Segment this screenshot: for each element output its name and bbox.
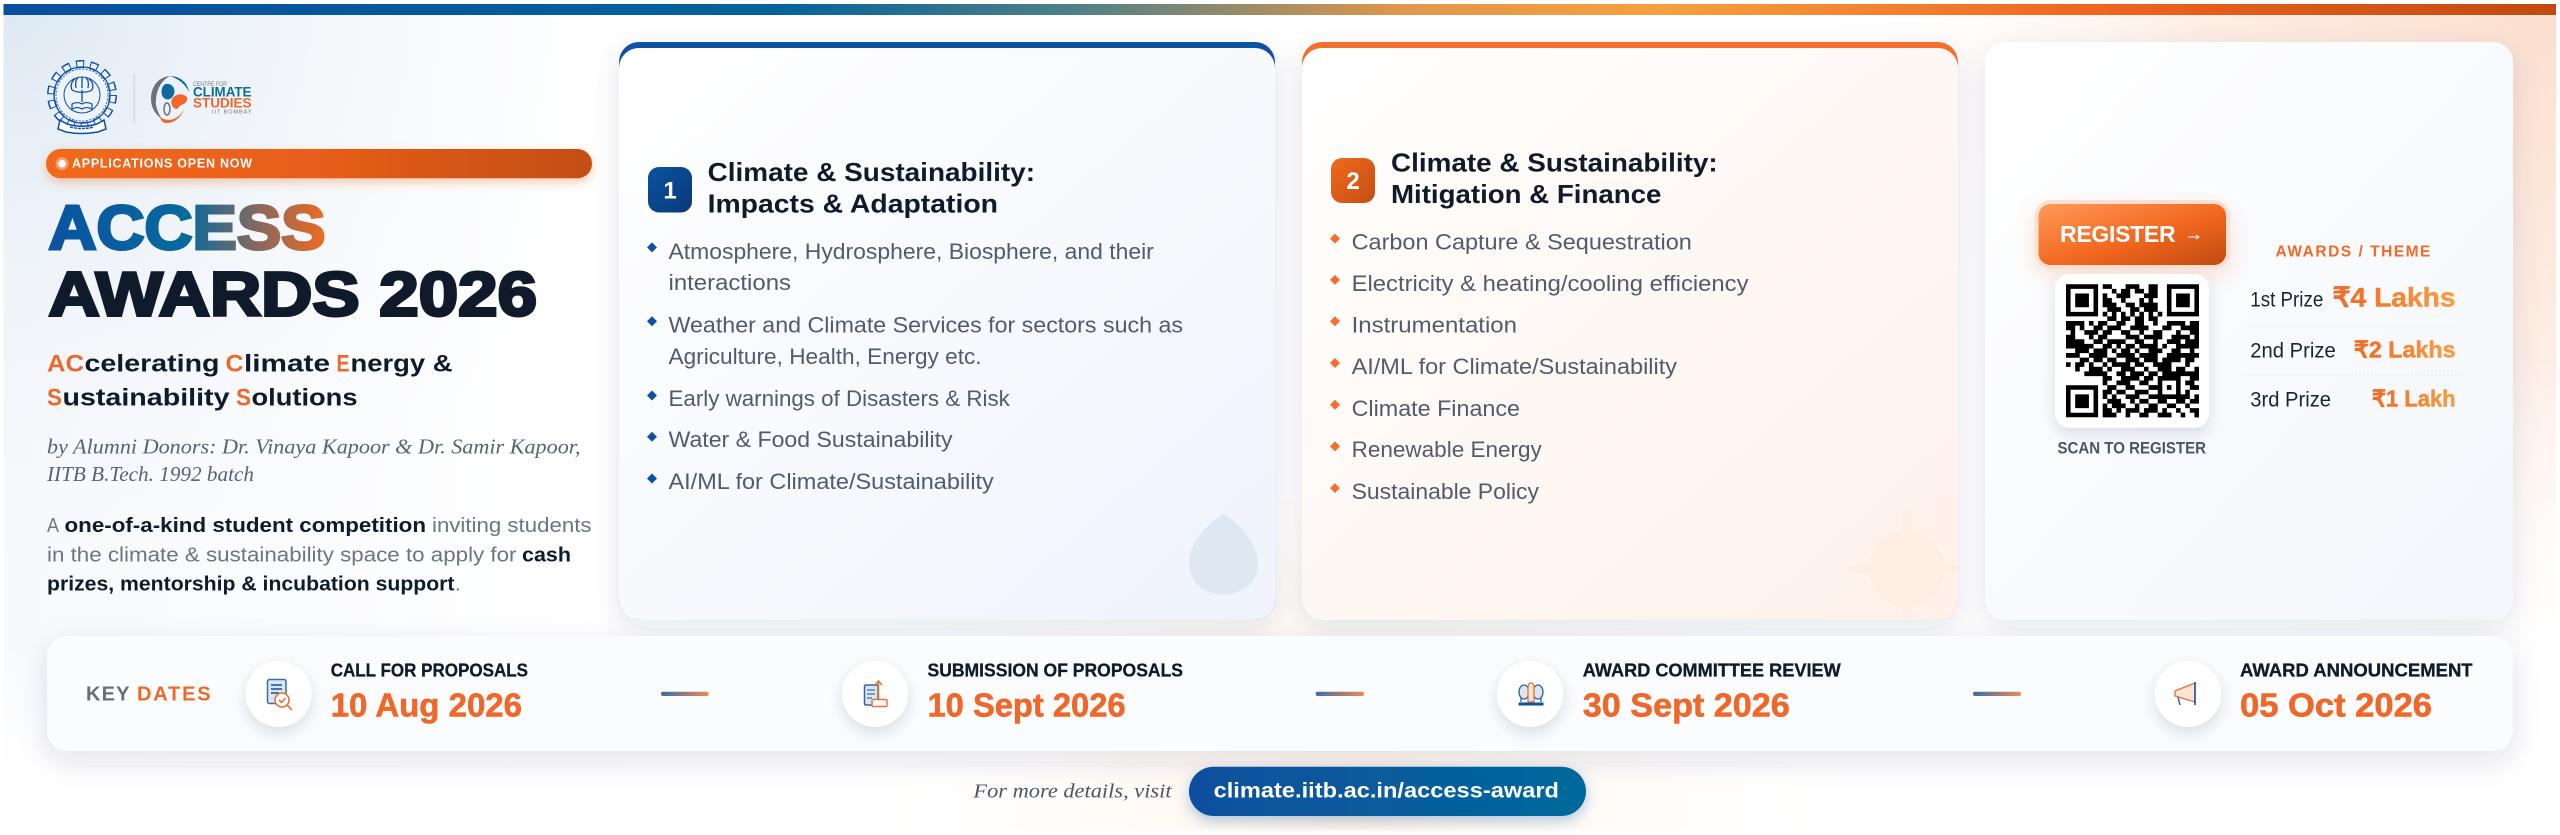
icon: sun xyxy=(1848,509,1928,586)
list: theme 1 topics: Atmosphere, Hydrosphere, Biosphere, and their xyxy=(668,239,1154,264)
icon: document search xyxy=(246,661,312,727)
register button xyxy=(2034,200,2230,269)
footer link: For more details, visit xyxy=(972,781,1172,803)
date: call for proposals xyxy=(246,661,528,727)
third prize xyxy=(2250,386,2456,412)
panel: theme 1 xyxy=(619,42,1275,620)
donors: by Alumni Donors: Dr. Vinaya Kapoor & Dr. Samir Kapoor, xyxy=(47,434,580,458)
date: submission of proposals: 10 Sept 2026 xyxy=(928,687,1126,724)
subtitle: ustainability xyxy=(62,384,230,411)
list: theme 1 topics xyxy=(647,239,1183,494)
scan caption: SCAN TO REGISTER xyxy=(2058,439,2206,457)
subtitle: S xyxy=(47,384,62,411)
heading 2: Climate & Sustainability: xyxy=(1391,148,1718,178)
heading 2 xyxy=(1391,148,1718,209)
subtitle: celerating xyxy=(84,351,220,378)
badge 1 xyxy=(648,167,692,212)
subtitle: E xyxy=(336,351,350,378)
heading 1: Climate & Sustainability: xyxy=(708,157,1035,187)
panel: key dates xyxy=(47,636,2513,751)
heading 2: Mitigation & Finance xyxy=(1391,179,1661,209)
QR code xyxy=(2055,274,2209,428)
icon: megaphone xyxy=(2155,661,2221,727)
logo: Centre for Climate Studies: CENTRE FOR xyxy=(193,81,227,88)
icon: committee xyxy=(1497,661,1563,727)
title: AWARDS 2026 xyxy=(48,261,537,330)
first prize xyxy=(2250,283,2456,313)
subtitle xyxy=(47,351,452,411)
list: theme 2 topics: Carbon Capture & Sequestration xyxy=(1352,230,1692,255)
logos xyxy=(51,64,252,134)
key dates label xyxy=(86,684,211,706)
register button: REGISTER xyxy=(2060,221,2176,247)
description: one-of-a-kind student competition xyxy=(64,515,426,537)
description: . xyxy=(455,574,461,596)
date: award announcement: AWARD ANNOUNCEMENT xyxy=(2240,661,2473,681)
divider xyxy=(134,73,135,124)
description: prizes, mentorship & incubation support xyxy=(47,574,455,596)
date: submission of proposals xyxy=(842,661,1183,727)
icon: document upload xyxy=(842,661,908,727)
logo: Centre for Climate Studies: STUDIES xyxy=(193,96,252,111)
heading 1: Impacts & Adaptation xyxy=(708,188,998,218)
date: committee review: 30 Sept 2026 xyxy=(1583,687,1790,724)
heading 1 xyxy=(708,157,1035,218)
subtitle: olutions xyxy=(252,384,358,411)
awards table: AWARDS / THEME xyxy=(2276,244,2430,261)
logo: Centre for Climate Studies: IIT BOMBAY xyxy=(212,110,252,116)
third prize: 3rd Prize xyxy=(2250,389,2331,412)
date: award announcement xyxy=(2155,661,2473,727)
second prize xyxy=(2250,336,2456,362)
subtitle: nergy & xyxy=(350,351,452,378)
date: call for proposals: CALL FOR PROPOSALS xyxy=(331,661,528,681)
awards table xyxy=(2247,244,2460,412)
logo: IIT Bombay crest xyxy=(51,64,113,134)
top gradient bar xyxy=(4,4,2556,15)
second prize: 2nd Prize xyxy=(2250,339,2336,362)
applications pill: APPLICATIONS OPEN NOW xyxy=(72,157,252,171)
description: inviting students xyxy=(432,515,592,537)
list: theme 2 topics: Renewable Energy xyxy=(1352,437,1542,462)
list: theme 2 topics xyxy=(1330,230,1748,504)
list: theme 2 topics: Climate Finance xyxy=(1352,396,1520,421)
list: theme 1 topics: Weather and Climate Services for sectors such as xyxy=(668,312,1183,337)
list: theme 2 topics: Electricity & heating/cooling efficiency xyxy=(1352,271,1748,296)
url button: climate.iitb.ac.in/access-award xyxy=(1214,780,1559,803)
subtitle: C xyxy=(226,351,244,378)
panel: register and awards xyxy=(1985,42,2513,620)
panel: theme 2 xyxy=(1302,42,1958,620)
list: theme 1 topics: Early warnings of Disasters & Risk xyxy=(668,386,1011,411)
donors: IITB B.Tech. 1992 batch xyxy=(46,462,254,486)
description: A xyxy=(47,515,60,537)
list: theme 2 topics: AI/ML for Climate/Sustainability xyxy=(1352,354,1677,379)
subtitle: limate xyxy=(244,351,330,378)
icon: water drop xyxy=(1189,514,1258,594)
subtitle: S xyxy=(236,384,251,411)
date: call for proposals: 10 Aug 2026 xyxy=(331,687,522,724)
list: theme 2 topics: Instrumentation xyxy=(1352,313,1517,338)
url button xyxy=(1189,767,1586,816)
badge 2: 2 xyxy=(1346,168,1360,195)
badge 1: 1 xyxy=(663,178,677,204)
list: theme 2 topics: Sustainable Policy xyxy=(1352,479,1539,504)
logo: Centre for Climate Studies: CLIMATE xyxy=(193,85,252,100)
second prize: ₹2 Lakhs xyxy=(2354,336,2456,362)
date: submission of proposals: SUBMISSION OF PROPOSALS xyxy=(928,661,1183,681)
date: committee review xyxy=(1497,661,1841,727)
title xyxy=(48,194,537,330)
footer link xyxy=(972,767,1586,816)
key dates label: KEY xyxy=(86,684,130,706)
date: award announcement: 05 Oct 2026 xyxy=(2240,687,2432,724)
third prize: ₹1 Lakh xyxy=(2372,386,2456,412)
description: in the climate & sustainability space to apply for xyxy=(47,544,517,566)
first prize: ₹4 Lakhs xyxy=(2333,283,2456,313)
list: theme 1 topics: Water & Food Sustainability xyxy=(668,427,953,452)
applications pill xyxy=(46,149,592,178)
pulsing dot xyxy=(56,157,68,170)
list: theme 1 topics: Agriculture, Health, Energy etc. xyxy=(668,344,982,369)
list: theme 1 topics: interactions xyxy=(668,270,791,295)
key dates label: DATES xyxy=(137,684,211,706)
logo: Centre for Climate Studies xyxy=(151,76,252,123)
first prize: 1st Prize xyxy=(2250,289,2323,312)
description xyxy=(47,515,592,596)
description: cash xyxy=(522,544,571,566)
title: ACCESS xyxy=(48,194,326,263)
date: committee review: AWARD COMMITTEE REVIEW xyxy=(1583,661,1841,681)
subtitle: AC xyxy=(47,351,84,378)
list: theme 1 topics: AI/ML for Climate/Sustainability xyxy=(668,469,994,494)
donors xyxy=(46,434,581,486)
badge 2 xyxy=(1331,158,1375,203)
